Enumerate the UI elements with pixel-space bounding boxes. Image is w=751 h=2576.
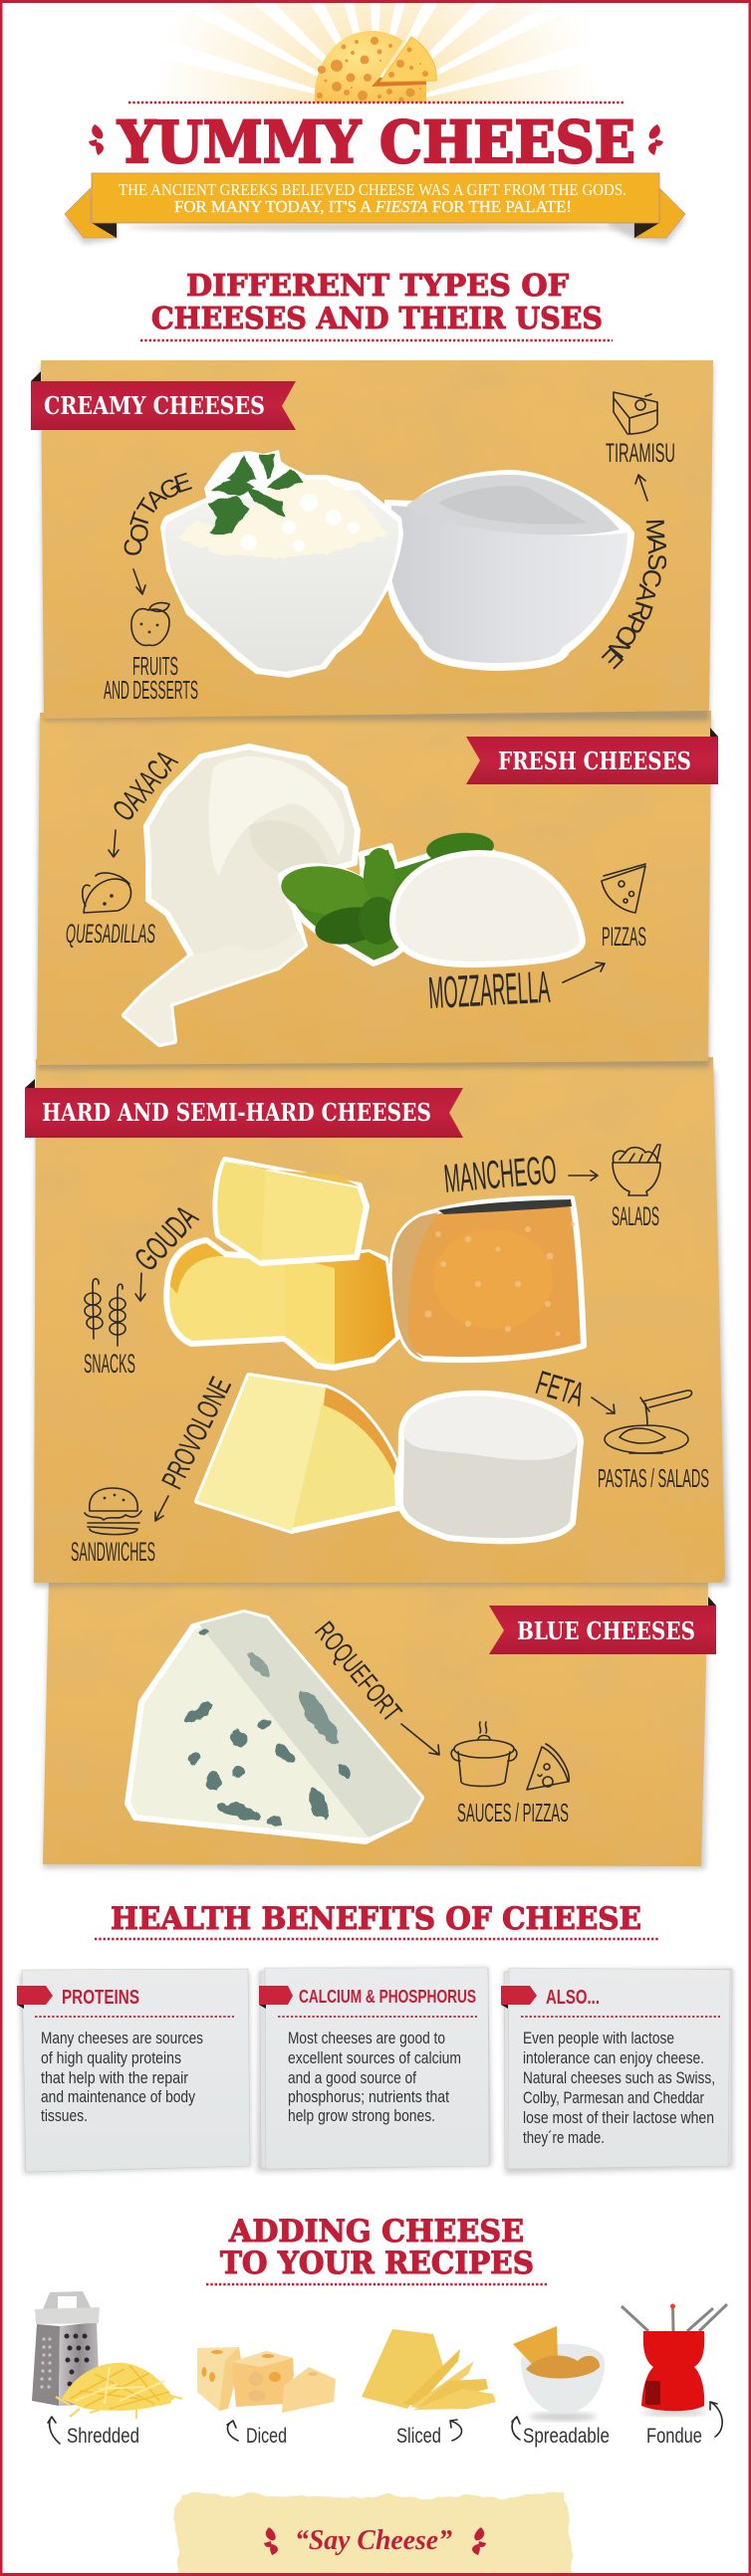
ribbon: blue cheeses [489,1597,716,1654]
sticker: mascarpone bowl [384,470,634,671]
ribbon: blue cheeses: BLUE CHEESES [517,1616,695,1645]
arrow [635,475,647,501]
card text: and a good source of [288,2068,416,2087]
icon: salad bowl [613,1145,660,1195]
card: also [501,1968,733,2174]
sticker: oaxaca [125,747,358,1044]
arrow [563,963,605,982]
label: gouda: GOUDA [127,1198,205,1278]
card text [523,2029,715,2147]
panel: fresh cheeses: PIZZAS [602,922,646,952]
item: sliced cheese [362,2329,496,2410]
panel: fresh cheeses: QUESADILLAS [66,919,155,949]
card: calcium and phosphorus [257,1968,492,2172]
heading: adding cheese [220,2214,534,2281]
card text: Most cheeses are good to [288,2029,445,2047]
card: proteins [17,1969,251,2174]
card text: excellent sources of calcium [288,2048,461,2067]
sticker: manchego [392,1198,584,1360]
label: sliced: Sliced [396,2425,441,2448]
header sun rays [174,3,576,103]
title [89,108,663,176]
torn paper: say cheese [173,2491,573,2574]
card title: CALCIUM & PHOSPHORUS [299,1987,476,2007]
label: diced [227,2421,287,2448]
heading: different types: DIFFERENT TYPES OF [186,269,569,304]
icon: tiramisu [614,392,657,434]
item: diced cheese [197,2347,336,2413]
label: cottage: COTTAGE [120,468,195,557]
icon: leaf left [89,124,104,155]
item: fondue pot [622,2303,727,2416]
icon: leaf [264,2527,278,2555]
arrow [592,1397,615,1413]
heading: adding cheese: TO YOUR RECIPES [220,2246,534,2281]
label: diced: Diced [246,2425,287,2448]
icon: skewers [85,1279,125,1346]
card text: lose most of their lactose when [523,2108,714,2127]
arrow [109,830,119,857]
sticker: gouda [166,1160,397,1368]
sticker: basil and mozzarella [278,830,583,965]
tag [17,1986,53,2009]
icon: leaf right [648,124,663,155]
card text: and maintenance of body [41,2087,195,2106]
sticker: cottage bowl [160,450,403,678]
panel: blue cheeses [43,1583,716,1869]
sticker: provolone [197,1376,398,1531]
label: fondue [646,2402,722,2448]
ribbon text [119,180,626,216]
icon: pizza [602,864,645,913]
panel: hard and semi-hard cheeses: SANDWICHES [71,1537,155,1567]
panel: hard and semi-hard cheeses: SALADS [612,1201,659,1231]
label: tiramisu: TIRAMISU [606,438,675,468]
arrow [569,1171,598,1181]
card text [288,2029,461,2125]
ribbon text: FOR MANY TODAY, IT'S A FIESTA FOR THE PALATE! [174,197,572,216]
icon: leaf [472,2527,486,2555]
card text [41,2029,203,2125]
sticker: feta [400,1394,581,1541]
card text: help grow strong bones. [288,2106,435,2125]
panel: fresh cheeses [37,711,718,1069]
heading: adding cheese: ADDING CHEESE [228,2214,524,2250]
arrow [401,1724,439,1755]
panel: hard and semi-hard cheeses: SNACKS [84,1349,135,1379]
icon: apple [131,603,169,645]
ribbon: fresh cheeses [466,728,718,784]
icon: pasta plate [605,1391,692,1453]
card text: tissues. [41,2106,88,2125]
tag [501,1986,537,2009]
ribbon: hard and semi-hard: HARD AND SEMI-HARD CHEESES [42,1098,431,1127]
card text: they´re made. [523,2128,605,2147]
label: shredded [48,2417,139,2448]
label: feta: FETA [532,1364,589,1414]
panel: creamy cheeses [31,360,713,721]
divider [128,102,624,104]
label: provolone: PROVOLONE [156,1373,238,1494]
label: fruits and desserts [104,651,198,705]
label: shredded: Shredded [67,2425,139,2448]
label: fruits and desserts: FRUITS [132,651,178,681]
card text: of high quality proteins [41,2048,181,2067]
label: spreadable: Spreadable [523,2425,610,2448]
card text: Many cheeses are sources [41,2029,203,2047]
item: spreadable dip [513,2326,605,2421]
arrow [135,1273,145,1301]
card text: that help with the repair [41,2068,188,2087]
label: oaxaca: OAXACA [106,744,184,827]
icon: pot [451,1722,517,1786]
card text: Even people with lactose [523,2029,674,2047]
heading: different types: CHEESES AND THEIR USES [151,302,603,336]
title text: YUMMY CHEESE [117,108,635,176]
ribbon text: THE ANCIENT GREEKS BELIEVED CHEESE WAS A GIFT FROM THE GODS. [119,180,626,199]
sticker: roquefort [127,1612,421,1841]
label: spreadable [512,2417,610,2448]
card text: phosphorus; nutrients that [288,2087,449,2106]
yellow ribbon banner [65,173,685,244]
ribbon: hard and semi-hard [25,1079,463,1138]
icon: parsley [206,453,305,534]
card title: PROTEINS [62,1987,139,2009]
panel: creamy cheeses: AND DESSERTS [104,675,198,705]
panel: hard and semi-hard cheeses [25,1057,729,1587]
item: grater with shredded cheese [32,2291,182,2419]
label: mascarpone: MASCARPONE [597,518,672,675]
say cheese text: “Say Cheese” [295,2525,452,2556]
ribbon: creamy cheeses [31,371,296,430]
label: roquefort: ROQUEFORT [309,1615,407,1727]
icon: burger [85,1488,141,1535]
panel: hard and semi-hard cheeses: MANCHEGO [442,1148,558,1201]
heading: health benefits: HEALTH BENEFITS OF CHEESE [111,1901,641,1937]
panel: fresh cheeses: MOZZARELLA [427,962,551,1018]
card text: intolerance can enjoy cheese. [523,2048,704,2067]
label: sauces / pizzas: SAUCES / PIZZAS [457,1798,569,1827]
arrow [155,1496,168,1521]
card title: ALSO... [546,1987,600,2009]
ribbon: fresh cheeses: FRESH CHEESES [498,747,691,775]
icon: taco [83,873,130,913]
icon: cheese wheel [315,31,436,103]
card text: Colby, Parmesan and Cheddar [523,2088,704,2107]
icon: pizza slice [527,1744,569,1790]
tag [259,1986,293,2009]
heading: different types [151,269,603,336]
label: fondue: Fondue [646,2425,702,2448]
ribbon: creamy cheeses: CREAMY CHEESES [44,391,265,420]
arrow [133,569,145,594]
